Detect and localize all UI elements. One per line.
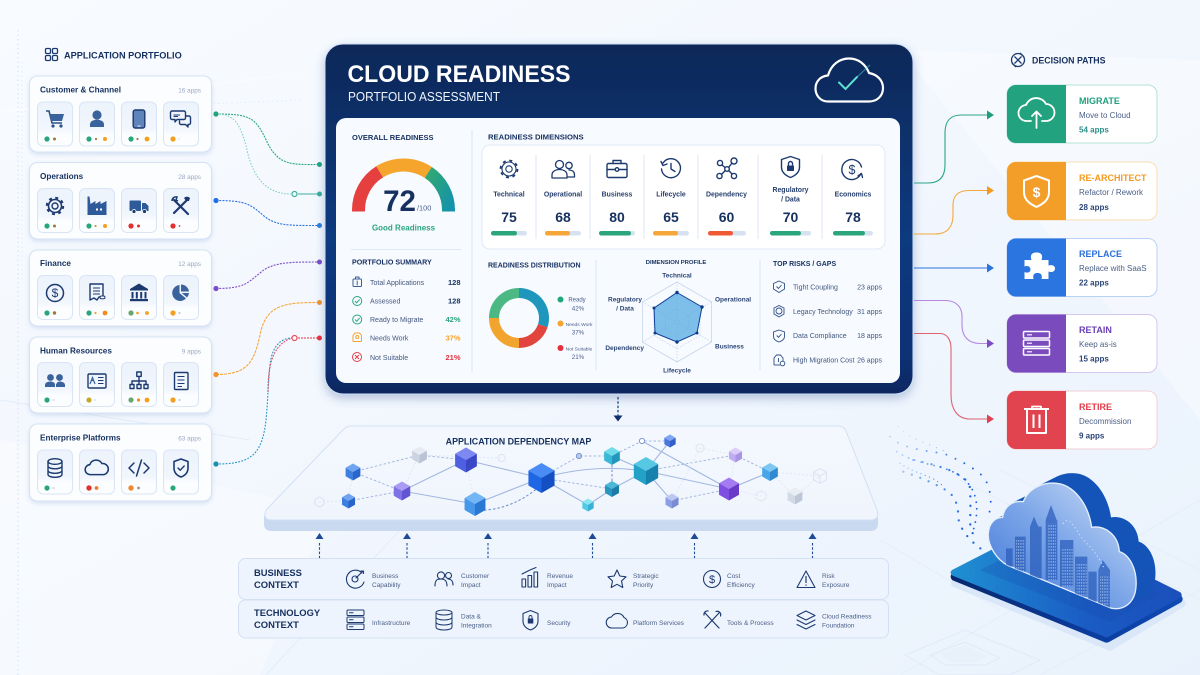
overall readiness gauge <box>352 133 449 232</box>
path card: re-architect: Refactor / Rework <box>1079 188 1144 197</box>
portfolio summary: Not Suitable <box>370 355 408 362</box>
top risks and gaps: 31 apps <box>857 309 882 316</box>
top risks and gaps <box>773 261 882 366</box>
dimension: technical: 75 <box>501 209 517 225</box>
portfolio summary: 42% <box>445 315 461 324</box>
dimension: regulatory / data: 70 <box>783 209 798 225</box>
readiness distribution donut <box>488 262 593 361</box>
panel: finance <box>30 250 212 326</box>
icon: pie <box>172 284 189 301</box>
top risks and gaps: 26 apps <box>857 358 882 365</box>
item: data integration: Data & <box>461 614 482 620</box>
top risks and gaps: TOP RISKS / GAPS <box>773 261 836 268</box>
dimension profile radar: Lifecycle <box>663 368 691 374</box>
icon: code <box>129 460 149 476</box>
item: infrastructure <box>347 610 411 630</box>
dimension: regulatory / data: Regulatory <box>772 187 809 194</box>
icon: checklist <box>174 372 188 390</box>
item: business capability: Capability <box>372 582 401 589</box>
top risks and gaps: High Migration Cost <box>793 358 855 365</box>
portfolio summary <box>352 258 461 362</box>
decision arrows <box>914 110 994 424</box>
dimension profile radar: Operational <box>715 296 751 304</box>
icon: gear <box>47 198 63 214</box>
subtitle: PORTFOLIO ASSESSMENT <box>348 90 500 104</box>
dimension profile radar: Dependency <box>605 345 644 352</box>
dimension: economics: 78 <box>845 209 861 225</box>
path card: replace: REPLACE <box>1079 249 1122 259</box>
icon: invoice <box>90 284 105 300</box>
portfolio summary: Assessed <box>370 298 400 306</box>
icon: trash <box>1024 406 1049 433</box>
readiness distribution donut: Needs Work <box>566 322 593 328</box>
item: strategic priority <box>608 570 659 589</box>
item: cost efficiency: $ <box>709 574 715 586</box>
icon: phone <box>133 110 145 128</box>
dimension: regulatory / data <box>770 156 811 236</box>
path card: retain: 15 apps <box>1079 354 1109 364</box>
path card: re-architect <box>1007 162 1157 220</box>
item: data integration: Integration <box>461 622 492 630</box>
portfolio summary: 21% <box>445 353 461 362</box>
icon: needs work <box>353 333 362 342</box>
item: cloud readiness foundation <box>797 611 872 630</box>
dimension profile radar: Business <box>715 344 744 350</box>
panel: human resources <box>30 337 212 413</box>
icon: id card <box>88 374 106 388</box>
dimension profile radar <box>605 260 751 374</box>
dimension: technical <box>491 160 527 236</box>
path card: retire: 9 apps <box>1079 432 1105 440</box>
item: security <box>523 610 571 630</box>
icon: factory <box>88 196 106 215</box>
readiness distribution donut: 37% <box>572 330 585 336</box>
dimension: economics <box>833 160 873 236</box>
portfolio summary: 128 <box>448 278 460 287</box>
top risks and gaps: 18 apps <box>857 333 882 340</box>
item: risk exposure: Risk <box>822 573 835 580</box>
icon: assessed <box>353 296 362 306</box>
arrow: dashboard to dependency map <box>614 397 622 422</box>
icon: chat <box>170 111 190 127</box>
icon: not suitable <box>352 352 362 362</box>
map connections <box>315 438 820 510</box>
dimension profile radar: / Data <box>616 306 634 312</box>
panel: enterprise platforms: Enterprise Platforms <box>40 434 121 442</box>
panel: operations: 28 apps <box>178 174 201 181</box>
portfolio summary: Total Applications <box>370 280 425 287</box>
heading: decision paths <box>1012 53 1106 67</box>
icon: user <box>90 110 104 127</box>
white dashboard <box>336 118 900 383</box>
icon: dollar <box>46 284 64 302</box>
path card: replace <box>1007 238 1157 296</box>
icon: high migration cost <box>774 355 785 366</box>
item: cost efficiency: Efficiency <box>727 582 755 589</box>
panel: technology context <box>238 600 888 638</box>
dimension profile radar: Technical <box>662 272 692 280</box>
heading: decision paths: DECISION PATHS <box>1032 56 1106 66</box>
item: tools and process: Tools & Process <box>727 620 774 627</box>
readiness distribution donut: READINESS DISTRIBUTION <box>488 262 581 270</box>
icon: data compliance <box>774 330 784 342</box>
portfolio summary: PORTFOLIO SUMMARY <box>352 258 432 266</box>
panel: enterprise platforms <box>30 424 212 501</box>
dimension: lifecycle: 65 <box>663 209 679 225</box>
data stream particles <box>890 427 991 549</box>
item: revenue impact: Revenue <box>547 573 573 580</box>
dimension: lifecycle <box>653 159 689 236</box>
icon: cloud <box>85 460 108 475</box>
path card: retain <box>1007 314 1157 372</box>
panel: finance: Finance <box>40 259 71 268</box>
panel: business context: CONTEXT <box>254 579 299 590</box>
path card: retire <box>1007 391 1157 449</box>
overall readiness gauge: /100 <box>417 204 431 212</box>
item: risk exposure: Exposure <box>822 582 850 589</box>
dimension: economics: $ <box>849 163 856 177</box>
panel: technology context: TECHNOLOGY <box>254 607 321 618</box>
panel: customer and channel: Customer & Channel <box>40 86 121 94</box>
top risks and gaps: Tight Coupling <box>793 284 838 292</box>
panel: human resources: Human Resources <box>40 346 112 356</box>
portfolio summary: 128 <box>448 296 460 306</box>
dependency map platform <box>264 426 878 531</box>
icon: puzzle <box>1024 252 1055 279</box>
item: data integration <box>436 610 492 630</box>
icon: shield <box>174 459 188 477</box>
icon: dollar: $ <box>52 286 59 300</box>
item: cloud readiness foundation: Cloud Readiness <box>822 614 872 620</box>
path card: retain: Keep as-is <box>1079 340 1117 349</box>
dimension: technical: Technical <box>493 192 525 198</box>
item: strategic priority: Priority <box>633 582 654 589</box>
icon: cloud check <box>816 58 883 102</box>
item: tools and process <box>704 611 774 628</box>
portfolio summary: 37% <box>445 334 461 342</box>
main panel <box>325 44 913 394</box>
icon: cloud upload <box>1018 98 1054 128</box>
item: strategic priority: Strategic <box>633 573 659 580</box>
readiness distribution donut: Ready <box>568 298 586 304</box>
path card: migrate: 54 apps <box>1079 126 1109 134</box>
readiness distribution donut: 21% <box>572 354 585 361</box>
icon: tight coupling <box>774 281 784 292</box>
item: business capability <box>346 570 401 589</box>
path card: re-architect: 28 apps <box>1079 203 1109 212</box>
path card: re-architect: RE-ARCHITECT <box>1079 173 1147 183</box>
path card: replace: Replace with SaaS <box>1079 264 1147 273</box>
overall readiness gauge: Good Readiness <box>372 224 436 232</box>
arrows: context to dependency map <box>316 533 816 558</box>
connectors: portfolio to readiness panel <box>213 111 322 467</box>
item: risk exposure <box>797 571 850 589</box>
dimension: business: Business <box>602 192 632 198</box>
item: cost efficiency <box>704 570 755 589</box>
portfolio summary: Needs Work <box>370 336 409 342</box>
top risks and gaps: Data Compliance <box>793 333 847 340</box>
path card: retire: RETIRE <box>1079 402 1112 412</box>
item: cost efficiency: Cost <box>727 573 741 580</box>
path card: retire: Decommission <box>1079 417 1131 426</box>
icon: shield dollar <box>1024 176 1049 207</box>
item: security: Security <box>547 620 571 627</box>
icon: people <box>45 374 65 387</box>
panel: human resources: 9 apps <box>182 348 201 356</box>
dimension: operational: Operational <box>544 192 582 198</box>
icon: tools <box>172 197 190 214</box>
panel: customer and channel: 16 apps <box>178 88 201 94</box>
path card: replace: 22 apps <box>1079 278 1109 288</box>
heading: application portfolio: APPLICATION PORTFOLIO <box>64 50 182 60</box>
panel: business context: BUSINESS <box>254 567 302 578</box>
dimension profile radar: Regulatory <box>608 296 642 304</box>
icon: cart <box>46 111 64 128</box>
map title: APPLICATION DEPENDENCY MAP <box>446 436 591 446</box>
dimension: operational: 68 <box>555 209 571 225</box>
icon: shield dollar: $ <box>1033 184 1041 200</box>
readiness distribution donut: 42% <box>572 306 585 312</box>
dimension: lifecycle: Lifecycle <box>656 192 686 198</box>
item: platform services <box>606 613 685 628</box>
readiness dimensions <box>482 132 885 249</box>
platform base <box>954 527 1182 647</box>
title: CLOUD READINESS <box>348 61 570 88</box>
icon: truck <box>130 200 148 214</box>
path card: retain: RETAIN <box>1079 325 1112 335</box>
item: customer impact <box>435 572 490 589</box>
item: platform services: Platform Services <box>633 620 685 627</box>
icon: total applications <box>353 277 362 286</box>
item: revenue impact <box>522 568 573 589</box>
dimension: business <box>599 160 635 236</box>
readiness dimensions: READINESS DIMENSIONS <box>488 132 584 142</box>
item: customer impact: Impact <box>461 582 481 589</box>
panel: business context <box>238 558 888 600</box>
icon: legacy technology <box>774 306 784 317</box>
cloud city illustration <box>954 473 1182 647</box>
dimension: business: 80 <box>609 209 625 225</box>
dimension: economics: Economics <box>835 192 872 198</box>
skyline <box>1006 505 1110 610</box>
panel: enterprise platforms: 63 apps <box>178 436 201 442</box>
item: cloud readiness foundation: Foundation <box>822 622 855 630</box>
panel: customer and channel <box>30 76 212 152</box>
panel: finance: 12 apps <box>178 261 201 268</box>
top risks and gaps: Legacy Technology <box>793 309 853 316</box>
overall readiness gauge: OVERALL READINESS <box>352 133 434 142</box>
icon: bank <box>130 284 148 301</box>
panel: operations <box>30 162 212 239</box>
panel: technology context: CONTEXT <box>254 619 299 630</box>
item: customer impact: Customer <box>461 573 490 580</box>
cloud body <box>988 473 1155 610</box>
overall readiness gauge: 72 <box>383 185 416 218</box>
panel: operations: Operations <box>40 172 84 181</box>
portfolio summary: Ready to Migrate <box>370 317 423 324</box>
dimension: dependency: Dependency <box>706 192 747 198</box>
dimension: dependency <box>706 158 747 236</box>
icon: database <box>48 459 62 477</box>
icon: server <box>1024 332 1050 355</box>
dimension: regulatory / data: / Data <box>781 196 800 204</box>
item: business capability: Business <box>372 573 399 580</box>
path card: migrate: Move to Cloud <box>1079 111 1131 120</box>
dimension: operational <box>544 160 582 236</box>
top risks and gaps: 23 apps <box>857 284 882 292</box>
icon: org chart <box>130 372 148 388</box>
map nodes <box>342 434 827 516</box>
path card: migrate: MIGRATE <box>1079 96 1120 106</box>
item: revenue impact: Impact <box>547 582 567 589</box>
path card: migrate <box>1007 85 1157 143</box>
dimension: dependency: 60 <box>719 209 734 225</box>
item: infrastructure: Infrastructure <box>372 620 411 627</box>
readiness distribution donut: Not Suitable <box>566 346 593 352</box>
dimension profile radar: DIMENSION PROFILE <box>646 260 706 266</box>
icon: ready <box>353 315 362 324</box>
